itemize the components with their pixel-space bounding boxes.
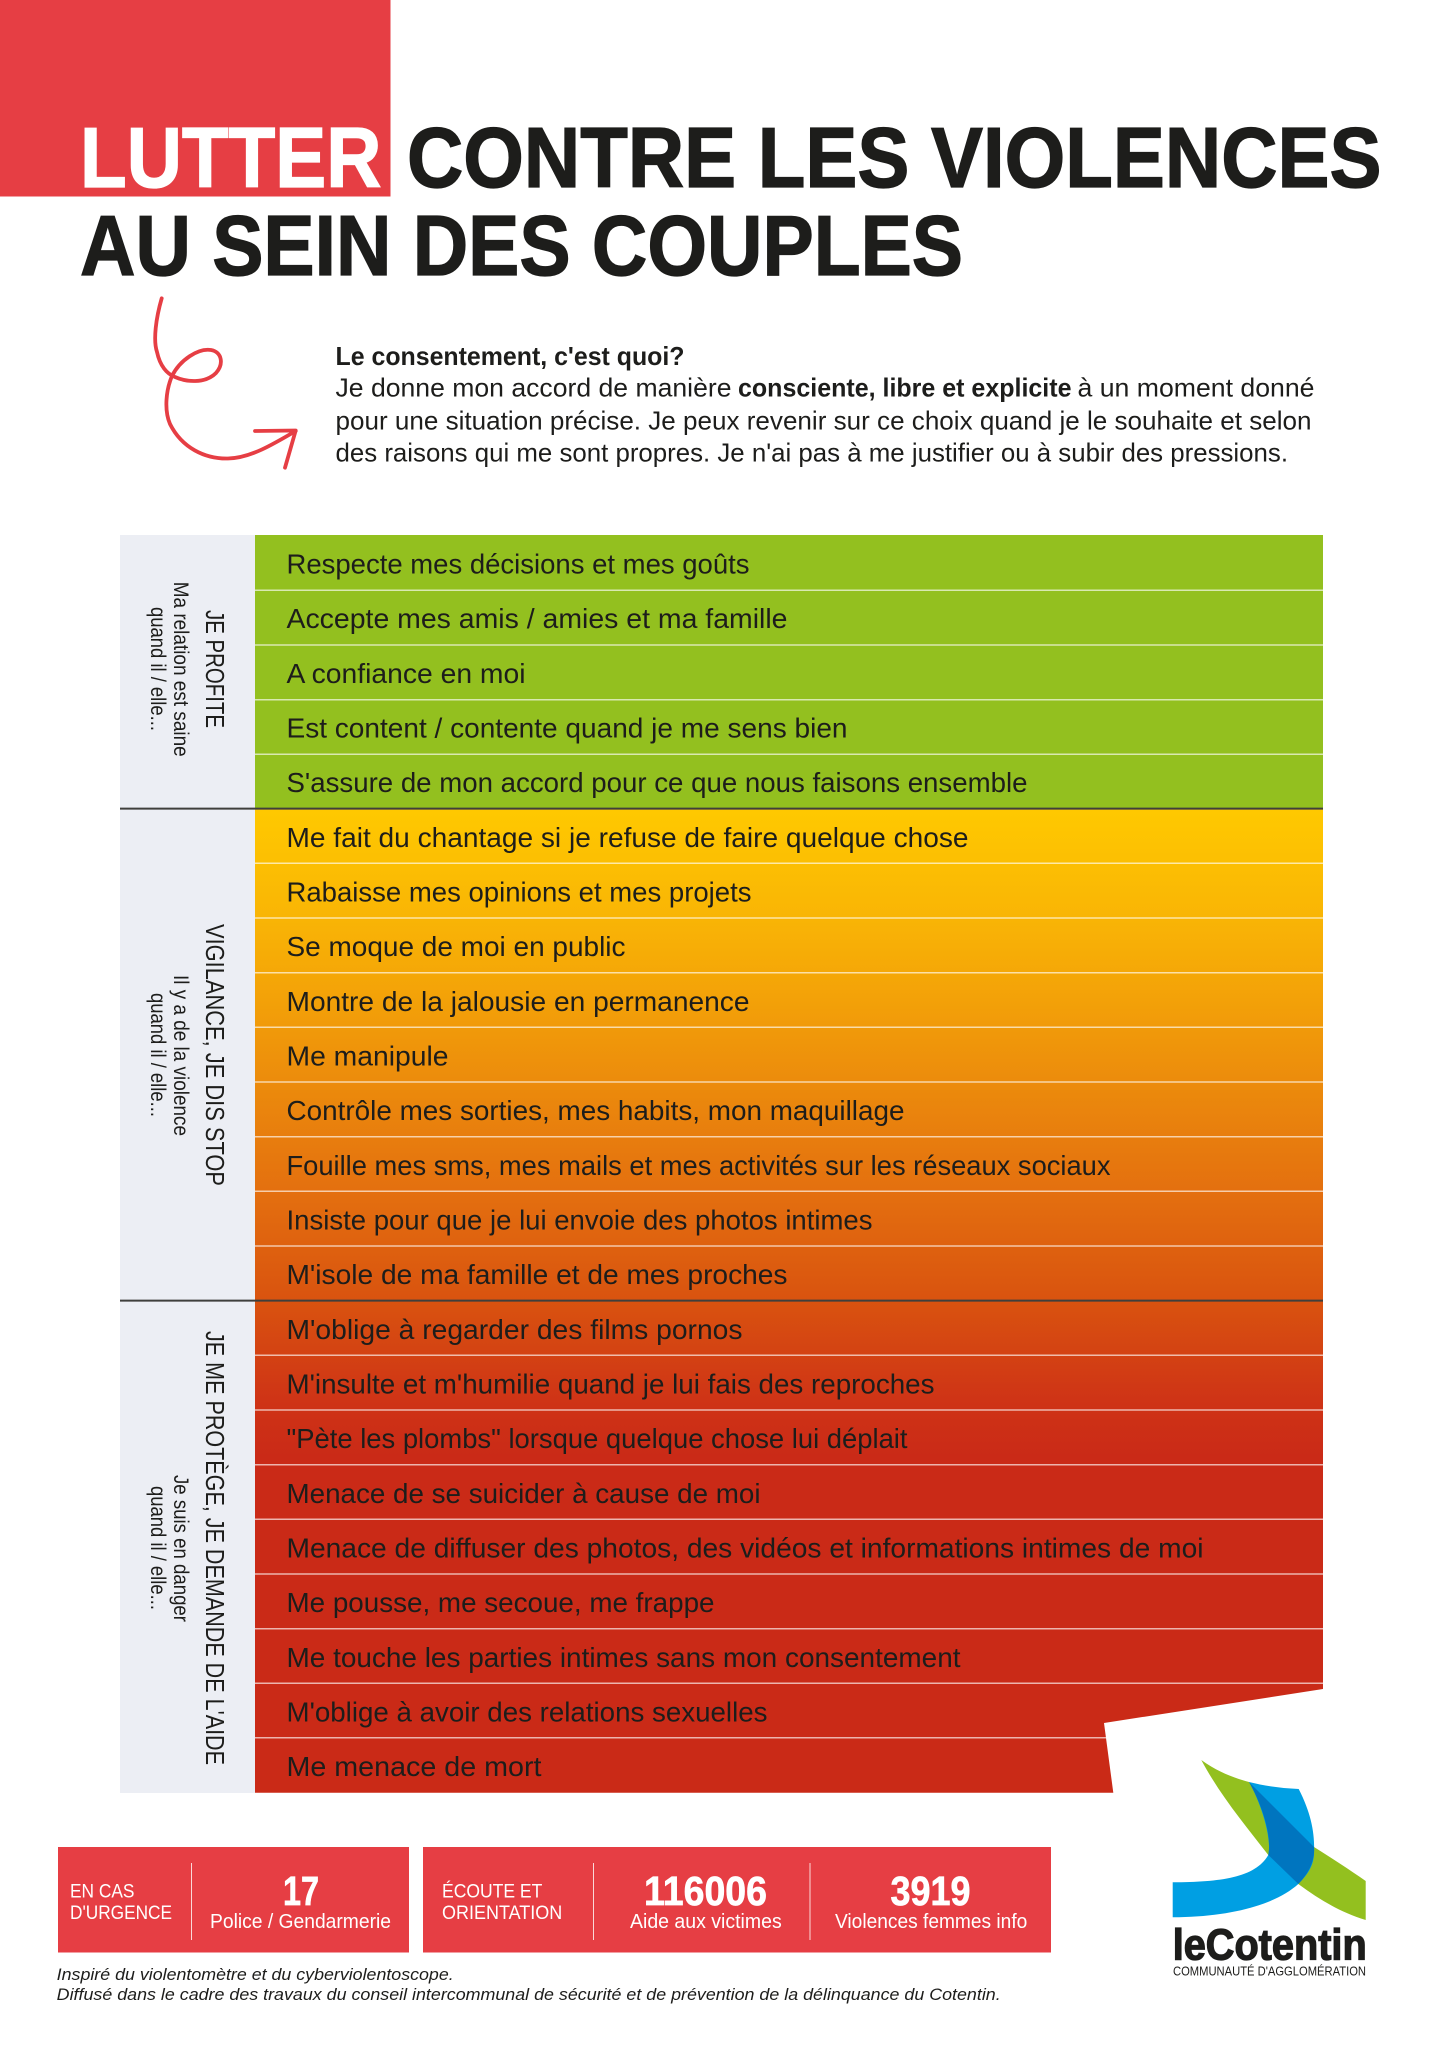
row 8: Se moque de moi en public	[286, 931, 626, 962]
logo wordmark: leCotentin	[1173, 1920, 1367, 1969]
heading: protection: JE ME PROTÈGE, JE DEMANDE DE L'AIDE	[200, 1331, 230, 1765]
footnote: Diffusé dans le cadre des travaux du conseil intercommunal de sécurité et de prévention de la délinquance du Cotentin.	[57, 1985, 1001, 2004]
text block: consent definition: à un moment donné	[1078, 373, 1314, 403]
footnote	[57, 1965, 1001, 2004]
row 16: M'insulte et m'humilie quand je lui fais des reproches	[286, 1368, 934, 1400]
logo tagline: COMMUNAUTÉ D'AGGLOMÉRATION	[1173, 1964, 1366, 1979]
text block: consent definition: pour une situation précise. Je peux revenir sur ce choix quand je le souhaite et selon	[336, 405, 1312, 435]
row 22: M'oblige à avoir des relations sexuelles	[286, 1696, 768, 1728]
caption: aide aux victimes: Aide aux victimes	[630, 1911, 782, 1933]
number: 3919: 3919	[890, 1868, 970, 1914]
row 9: Montre de la jalousie en permanence	[286, 986, 750, 1017]
title: CONTRE LES VIOLENCES	[407, 111, 1382, 206]
row 15: M'oblige à regarder des films pornos	[286, 1314, 742, 1345]
label: écoute et orientation: ÉCOUTE ET	[442, 1882, 543, 1903]
logo mark	[1173, 1760, 1366, 1920]
row 21: Me touche les parties intimes sans mon consentement	[286, 1642, 961, 1673]
heading: je profite: JE PROFITE	[200, 610, 230, 728]
row 3: A confiance en moi	[286, 658, 526, 689]
label: en cas d'urgence	[70, 1882, 172, 1924]
row 18: Menace de se suicider à cause de moi	[286, 1478, 760, 1509]
text block: consent definition	[336, 341, 1314, 468]
logo: le Cotentin	[1173, 1760, 1367, 1979]
text block: consent definition: des raisons qui me sont propres. Je n'ai pas à me justifier ou à subir des pressions.	[336, 438, 1288, 468]
panel: left category column	[120, 535, 255, 1793]
row separators	[255, 590, 1323, 1738]
heading: vigilance: VIGILANCE, JE DIS STOP	[200, 924, 230, 1186]
label: en cas d'urgence: D'URGENCE	[70, 1903, 172, 1924]
label: écoute et orientation: ORIENTATION	[442, 1903, 562, 1924]
text: quand 1: quand il / elle...	[146, 607, 169, 731]
text: quand 3: quand il / elle...	[146, 1486, 169, 1610]
row 20: Me pousse, me secoue, me frappe	[286, 1587, 714, 1618]
row 2: Accepte mes amis / amies et ma famille	[286, 603, 788, 634]
row 11: Contrôle mes sorties, mes habits, mon maquillage	[286, 1095, 904, 1126]
section dividers	[120, 809, 1323, 1301]
row 23: Me menace de mort	[286, 1751, 542, 1782]
row 1: Respecte mes décisions et mes goûts	[286, 548, 750, 580]
text: danger: Je suis en danger	[169, 1475, 192, 1622]
number: 17: 17	[283, 1868, 319, 1914]
text: quand 2: quand il / elle...	[146, 993, 169, 1117]
text block: consent definition: consciente, libre et explicite	[738, 373, 1072, 403]
red corner block	[0, 0, 390, 196]
text: saine: Ma relation est saine	[169, 582, 192, 757]
caption: violences femmes info: Violences femmes info	[835, 1911, 1027, 1933]
row 10: Me manipule	[286, 1040, 448, 1072]
number: 116006: 116006	[644, 1868, 767, 1914]
panel: gradient band with torn corner	[255, 808, 1323, 1793]
row 14: M'isole de ma famille et de mes proches	[286, 1259, 788, 1290]
title	[80, 111, 1382, 294]
caption: police: Police / Gendarmerie	[210, 1911, 391, 1933]
row 17: "Pète les plombs" lorsque quelque chose lui déplait	[286, 1423, 908, 1454]
row 19: Menace de diffuser des photos, des vidéos et informations intimes de moi	[286, 1532, 1204, 1564]
row 4: Est content / contente quand je me sens bien	[286, 712, 848, 744]
panel: listening numbers	[423, 1847, 1051, 1952]
panel: emergency number	[58, 1847, 409, 1952]
row 6: Me fait du chantage si je refuse de faire quelque chose	[286, 822, 968, 853]
text: violence: Il y a de la violence	[169, 975, 192, 1136]
footnote: Inspiré du violentomètre et du cyberviolentoscope.	[57, 1965, 454, 1984]
list: behaviours	[286, 548, 1204, 1782]
panel: green band	[255, 535, 1323, 808]
text block: consent definition: Je donne mon accord de manière	[336, 373, 732, 403]
label: en cas d'urgence: EN CAS	[70, 1882, 134, 1903]
row 7: Rabaisse mes opinions et mes projets	[286, 876, 752, 908]
row 12: Fouille mes sms, mes mails et mes activités sur les réseaux sociaux	[286, 1150, 1110, 1181]
title: LUTTER	[80, 111, 382, 206]
title: AU SEIN DES COUPLES	[80, 199, 963, 294]
row 5: S'assure de mon accord pour ce que nous faisons ensemble	[286, 767, 1028, 798]
label: écoute et orientation	[442, 1882, 562, 1924]
icon: curly arrow	[155, 298, 296, 468]
row 13: Insiste pour que je lui envoie des photos intimes	[286, 1204, 872, 1236]
text block: consent definition: Le consentement, c'est quoi?	[336, 341, 684, 371]
